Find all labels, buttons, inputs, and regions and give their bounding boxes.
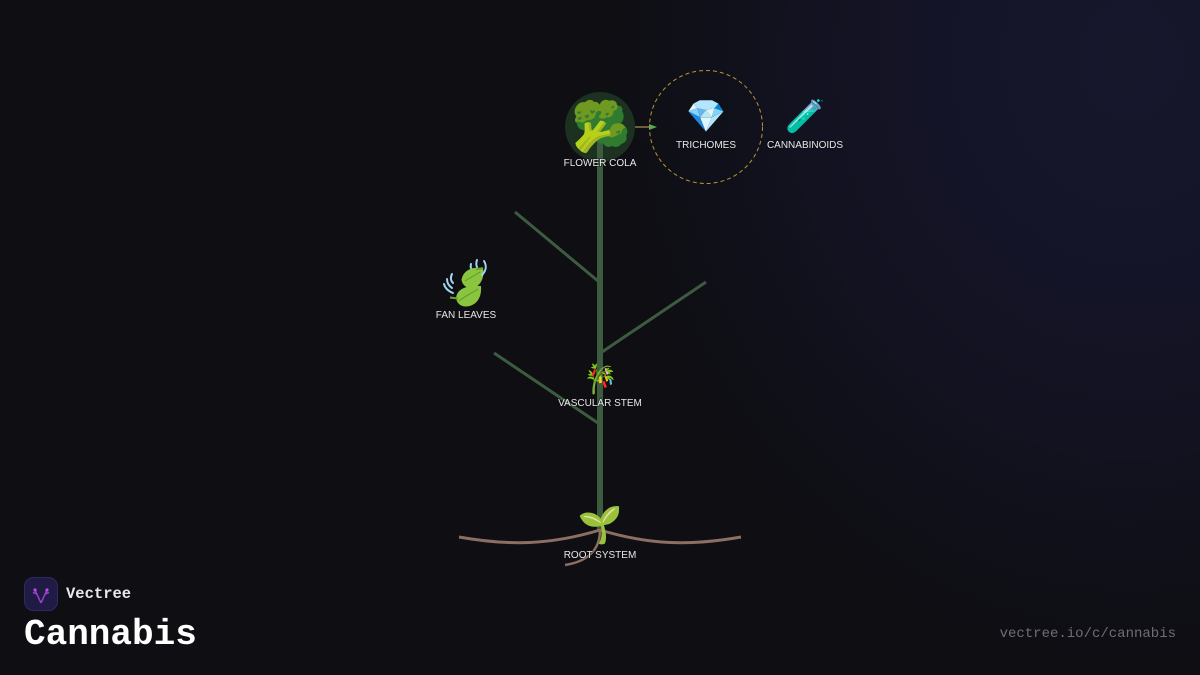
node: cannabinoids xyxy=(767,97,843,151)
node: root system: 🌱 xyxy=(578,504,622,546)
node: trichomes: TRICHOMES xyxy=(676,140,736,151)
title: Cannabis xyxy=(24,614,197,654)
node: cannabinoids: 🧪 xyxy=(785,97,825,135)
node: vascular stem: VASCULAR STEM xyxy=(558,398,642,409)
node: trichomes xyxy=(676,97,736,151)
icon: leaves in wind xyxy=(444,260,486,306)
node: trichomes: 💎 xyxy=(686,97,726,135)
right branch xyxy=(602,282,706,352)
roots xyxy=(459,530,741,565)
node: flower cola: FLOWER COLA xyxy=(564,158,637,169)
node: root system: ROOT SYSTEM xyxy=(564,550,636,561)
node: root system xyxy=(564,504,636,561)
brand name: Vectree xyxy=(66,584,131,602)
node: flower cola: 🥦 xyxy=(571,98,631,155)
node: vascular stem xyxy=(558,362,642,409)
trichome highlight ring xyxy=(650,70,762,184)
flower head backdrop xyxy=(565,92,635,162)
node: fan leaves xyxy=(436,260,497,321)
node: flower cola xyxy=(564,98,637,169)
upper left branch xyxy=(515,212,598,281)
icon: vectree logo xyxy=(24,577,58,611)
source url: vectree.io/c/cannabis xyxy=(1000,626,1176,642)
node: fan leaves: FAN LEAVES xyxy=(436,310,497,321)
node: vascular stem: 🎋 xyxy=(583,362,618,396)
lower left branch xyxy=(494,353,598,423)
main stem xyxy=(597,140,603,530)
arrow: flower to trichomes xyxy=(635,124,657,130)
node: cannabinoids: CANNABINOIDS xyxy=(767,140,843,151)
